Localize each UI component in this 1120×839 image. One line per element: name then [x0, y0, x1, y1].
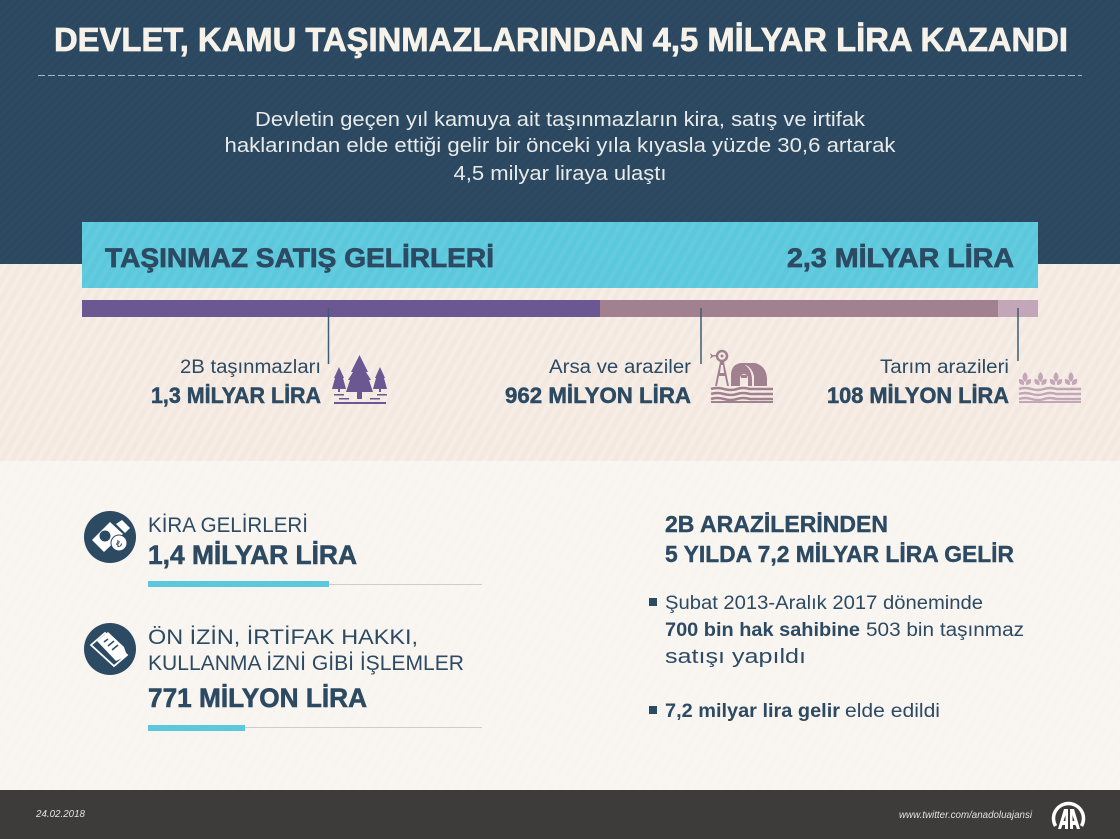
block: rent income — [148, 513, 357, 570]
block: permits and easements — [148, 625, 464, 713]
panel: footer — [0, 790, 1120, 839]
bullet list: Şubat 2013-Aralık 2017 döneminde — [665, 593, 983, 614]
heading: 2B land income: 2B ARAZİLERİNDEN — [665, 511, 888, 537]
icon: crops and field — [1019, 372, 1081, 403]
block: rent income: KİRA GELİRLERİ — [148, 513, 308, 537]
label: agricultural land: 108 MİLYON LİRA — [827, 383, 1009, 408]
icon: banknotes and coins — [84, 511, 136, 563]
intro text: Devletin geçen yıl kamuya ait taşınmazların kira, satış ve irtifak — [255, 109, 866, 131]
panel: sales section background — [0, 264, 1120, 461]
heading: 2B land income — [665, 511, 1014, 567]
label: land and plots: Arsa ve araziler — [549, 357, 692, 378]
icon: pine trees — [332, 355, 387, 404]
block: permits and easements: KULLANMA İZNİ GİBİ İŞLEMLER — [148, 651, 464, 675]
icon: banknotes and coins: ₺ — [116, 539, 123, 550]
panel: lower section background — [0, 461, 1120, 790]
label: land and plots — [505, 357, 692, 408]
banner: property sales income: 2,3 MİLYAR LİRA — [787, 243, 1014, 273]
label: 2B properties: 2B taşınmazları — [180, 357, 321, 378]
progress bar: rent income — [148, 581, 482, 587]
label: 2B properties — [151, 357, 321, 408]
progress bar: permits — [148, 725, 482, 731]
bullet list — [649, 593, 1024, 722]
title: DEVLET, KAMU TAŞINMAZLARINDAN 4,5 MİLYAR LİRA KAZANDI — [54, 21, 1068, 58]
bullet list: 503 bin taşınmaz — [866, 620, 1024, 641]
intro text: 4,5 milyar liraya ulaştı — [454, 163, 666, 185]
banner: property sales income — [82, 222, 1038, 288]
bullet list: 700 bin hak sahibine — [665, 620, 860, 641]
bullet list: satışı yapıldı — [665, 646, 806, 668]
icon: windmill and barn — [710, 351, 773, 403]
icon: documents — [84, 623, 136, 675]
bullet list: elde edildi — [845, 701, 940, 722]
icon: agency logo — [1054, 804, 1084, 829]
date: 24.02.2018 — [35, 808, 85, 820]
source link: www.twitter.com/anadoluajansi — [899, 809, 1033, 821]
stacked bar — [82, 300, 1038, 317]
block: permits and easements: 771 MİLYON LİRA — [148, 683, 367, 713]
label: agricultural land — [827, 357, 1009, 408]
bullet list: 7,2 milyar lira gelir — [665, 701, 841, 722]
block: rent income: 1,4 MİLYAR LİRA — [148, 540, 357, 570]
heading: 2B land income: 5 YILDA 7,2 MİLYAR LİRA GELİR — [665, 541, 1014, 567]
panel: header background — [0, 0, 1120, 264]
label: agricultural land: Tarım arazileri — [880, 357, 1009, 378]
intro text — [224, 109, 897, 185]
label: land and plots: 962 MİLYON LİRA — [505, 383, 691, 408]
banner: property sales income: TAŞINMAZ SATIŞ GELİRLERİ — [105, 243, 494, 273]
label: 2B properties: 1,3 MİLYAR LİRA — [151, 383, 321, 408]
block: permits and easements: ÖN İZİN, İRTİFAK HAKKI, — [148, 625, 418, 649]
intro text: haklarından elde ettiği gelir bir önceki yıla kıyasla yüzde 30,6 artarak — [224, 135, 897, 157]
